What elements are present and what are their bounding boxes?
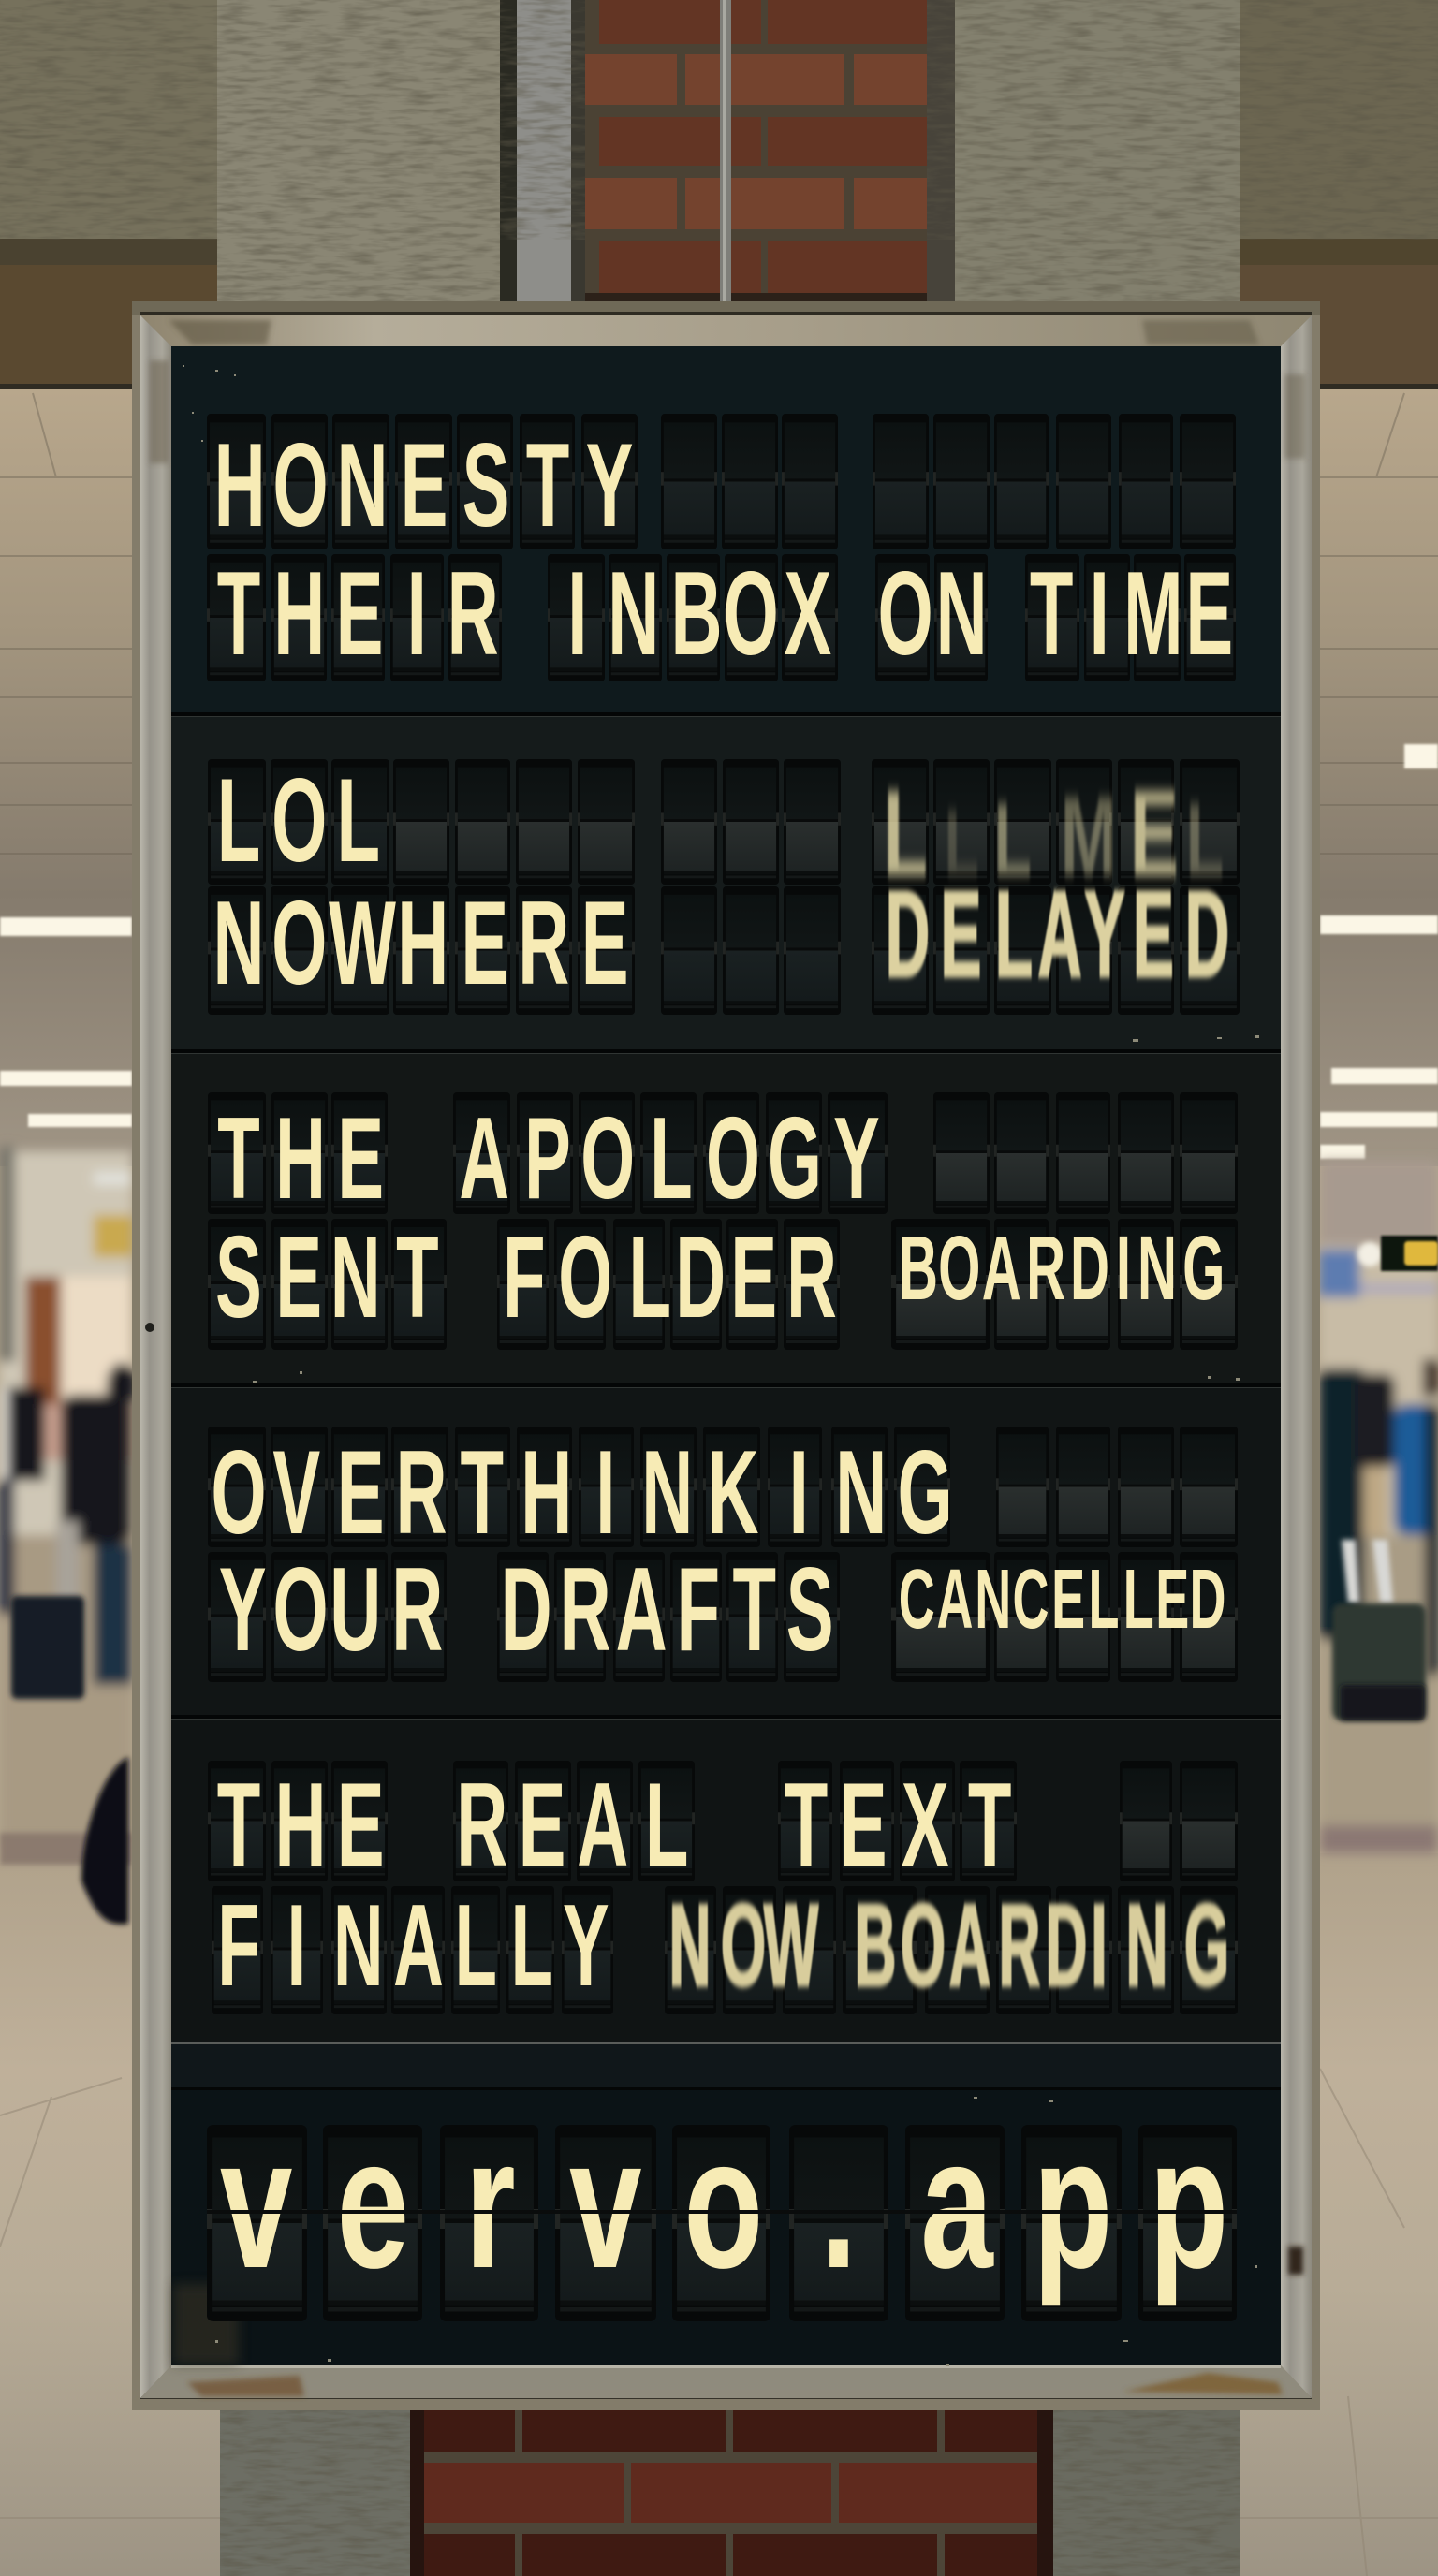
- text: YOUR DRAFTS: YOUR DRAFTS: [219, 1544, 834, 1676]
- text: blurred flipping letters: M: [1061, 773, 1117, 899]
- panel 3 flap cells: [208, 1092, 1238, 1350]
- text: CANCELLED: CANCELLED: [899, 1552, 1225, 1646]
- panel 2 flap cells: [208, 759, 1240, 1015]
- right concourse: signs, travellers and luggage: [1319, 1161, 1438, 1853]
- right suitcase: [1332, 1540, 1426, 1720]
- lower brick wall: [410, 2406, 1053, 2576]
- text: blurred flipping letters: L: [883, 765, 928, 901]
- panel 6 flap cells: [207, 2125, 1237, 2321]
- text: OVERTHINKING: OVERTHINKING: [211, 1427, 953, 1559]
- text: THE REAL TEXT: THE REAL TEXT: [217, 1759, 1011, 1892]
- panel 4 flap cells: [208, 1427, 1238, 1682]
- frame grime and rust: [150, 320, 1305, 2396]
- text: blurred flipping letters: [883, 765, 1224, 901]
- text: HONESTY: HONESTY: [214, 419, 633, 552]
- board frame: [132, 301, 1320, 2410]
- text: THE APOLOGY: THE APOLOGY: [217, 1092, 880, 1223]
- text: vervo.app: vervo.app: [220, 2100, 1228, 2307]
- left suitcase: [11, 1596, 84, 1699]
- right signage: [1357, 1236, 1438, 1271]
- floor: [0, 1853, 1438, 2576]
- text: FINALLY: FINALLY: [217, 1880, 609, 2011]
- left concourse: shops, travellers and luggage: [0, 1147, 137, 1844]
- board backing: [171, 346, 1281, 2366]
- panel 1 flap cells: [207, 414, 1236, 681]
- panel 5: THE REAL TEXT / FINALLY / NOW BOARDING: [208, 1759, 1238, 2014]
- panel 4: OVERTHINKING / YOUR DRAFTS / CANCELLED: [208, 1427, 1238, 1682]
- text: blurred flipping letters: E: [1130, 765, 1179, 901]
- panel 2: LOL / NOWHERE / DELAYED: [208, 754, 1240, 1015]
- text: NOW BOARDING (motion blurred): NOW BOARDING: [669, 1880, 1229, 2011]
- text: NOWHERE: NOWHERE: [213, 877, 629, 1010]
- text: SENT FOLDER: SENT FOLDER: [215, 1211, 837, 1342]
- panel 3: THE APOLOGY / SENT FOLDER / BOARDING: [208, 1092, 1238, 1350]
- text: BOARDING: BOARDING: [899, 1218, 1225, 1319]
- upper brick wall and conduit pipe: [585, 0, 927, 304]
- panel 1: HONESTY / THEIR INBOX ON TIME: [207, 414, 1236, 681]
- text: LOL: LOL: [217, 754, 380, 887]
- left floor stripe and dropped bag: [0, 1757, 132, 1925]
- text: blurred flipping letters: L: [994, 783, 1032, 898]
- panel 6: vervo.app: [207, 2100, 1237, 2321]
- text: blurred flipping letters: L: [1186, 783, 1224, 898]
- text: blurred flipping letters: L: [945, 791, 979, 896]
- flap split line across letters: [207, 2210, 1237, 2214]
- panel 5 flap cells: [208, 1761, 1238, 2014]
- text: DELAYED (motion blurred): DELAYED: [886, 865, 1229, 1003]
- upper concrete pillars and metal strip: [0, 0, 1438, 304]
- ceiling lights: [0, 744, 1438, 1159]
- text: THEIR INBOX ON TIME: THEIR INBOX ON TIME: [217, 548, 1233, 681]
- lower concrete pillars: [220, 2406, 1240, 2576]
